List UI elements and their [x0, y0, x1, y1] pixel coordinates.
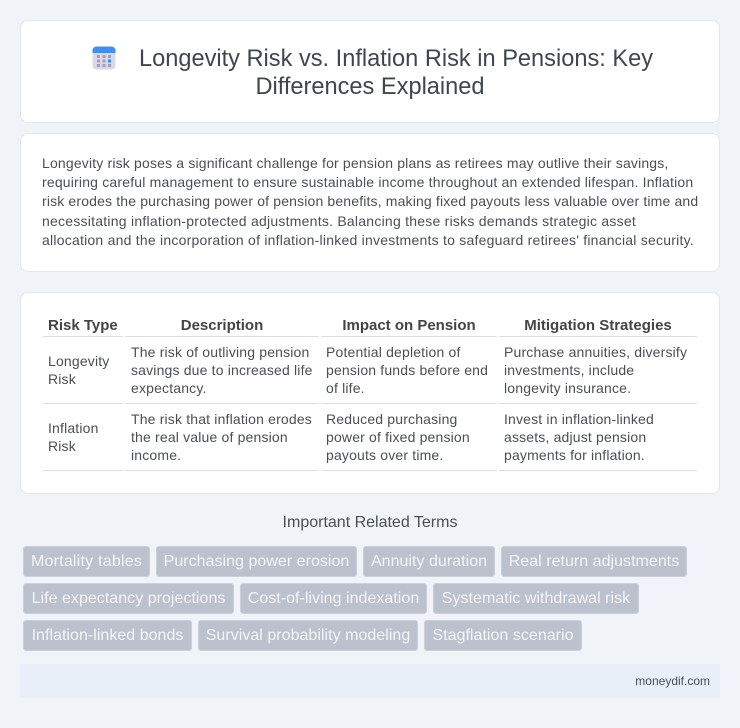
header panel [20, 20, 720, 123]
footer source: moneydif.com [635, 674, 710, 688]
row: inflation risk: income. [131, 447, 181, 463]
row: inflation risk: payouts over time. [326, 447, 443, 463]
related terms tags: Inflation-linked bonds [32, 627, 183, 644]
row: inflation risk: payments for inflation. [504, 447, 645, 463]
row: inflation risk: Inflation [48, 420, 99, 436]
row: longevity risk: investments, include [504, 362, 634, 378]
summary paragraph [42, 155, 698, 248]
table header: Impact on Pension [342, 317, 476, 334]
summary paragraph: necessitating inflation-protected adjustments. Balancing these risks demands strategic asset [42, 213, 636, 229]
summary paragraph: allocation and the incorporation of inflation-linked investments to safeguard retirees' financial security. [42, 232, 694, 248]
related terms tags: Life expectancy projections [32, 590, 225, 607]
related terms tags [23, 546, 687, 651]
row: longevity risk: savings due to increased life [131, 362, 313, 378]
table header: Risk Type [48, 317, 118, 334]
related terms tags: Systematic withdrawal risk [442, 590, 630, 607]
table header [48, 317, 672, 334]
related terms tags: Cost-of-living indexation [248, 590, 419, 607]
related terms tags: Survival probability modeling [206, 627, 410, 644]
title: Longevity Risk vs. Inflation Risk in Pensions: Key [139, 46, 653, 72]
row: longevity risk: of life. [326, 380, 365, 396]
row: longevity risk: expectancy. [131, 380, 207, 396]
table header: Mitigation Strategies [524, 317, 672, 334]
related terms tags: Mortality tables [31, 553, 142, 570]
row: inflation risk: Reduced purchasing [326, 411, 457, 427]
summary paragraph: requiring careful management to ensure sustainable income throughout an extended lifespan. Inflation [42, 174, 693, 190]
row: inflation risk [48, 411, 654, 463]
comparison table panel [20, 292, 720, 494]
row: inflation risk: Risk [48, 438, 76, 454]
summary paragraph: Longevity risk poses a significant challenge for pension plans as retirees may outlive their savings, [42, 155, 668, 171]
related terms tags: Purchasing power erosion [164, 553, 349, 570]
related terms heading: Important Related Terms [283, 514, 457, 531]
summary paragraph: risk erodes the purchasing power of pension benefits, making fixed payouts less valuable over time and [42, 193, 698, 209]
footer bar [20, 664, 720, 698]
related terms tags: Annuity duration [371, 553, 487, 570]
title: Differences Explained [255, 74, 485, 100]
row: longevity risk [48, 344, 687, 396]
row: inflation risk: power of fixed pension [326, 429, 470, 445]
row: inflation risk: the real value of pension [131, 429, 288, 445]
row: longevity risk: Purchase annuities, diversify [504, 344, 687, 360]
summary panel [20, 133, 720, 272]
row: longevity risk: pension funds before end [326, 362, 488, 378]
related terms tags: Stagflation scenario [432, 627, 574, 644]
table header: Description [181, 317, 263, 334]
row: inflation risk: The risk that inflation erodes [131, 411, 312, 427]
icon: calendar [92, 46, 116, 70]
row: longevity risk: longevity insurance. [504, 380, 631, 396]
row: longevity risk: Potential depletion of [326, 344, 461, 360]
row: longevity risk: Risk [48, 371, 76, 387]
related terms tags: Real return adjustments [509, 553, 679, 570]
row: longevity risk: Longevity [48, 353, 109, 369]
row: inflation risk: assets, adjust pension [504, 429, 646, 445]
row: inflation risk: Invest in inflation-linked [504, 411, 654, 427]
title [139, 46, 653, 100]
row: longevity risk: The risk of outliving pension [131, 344, 309, 360]
